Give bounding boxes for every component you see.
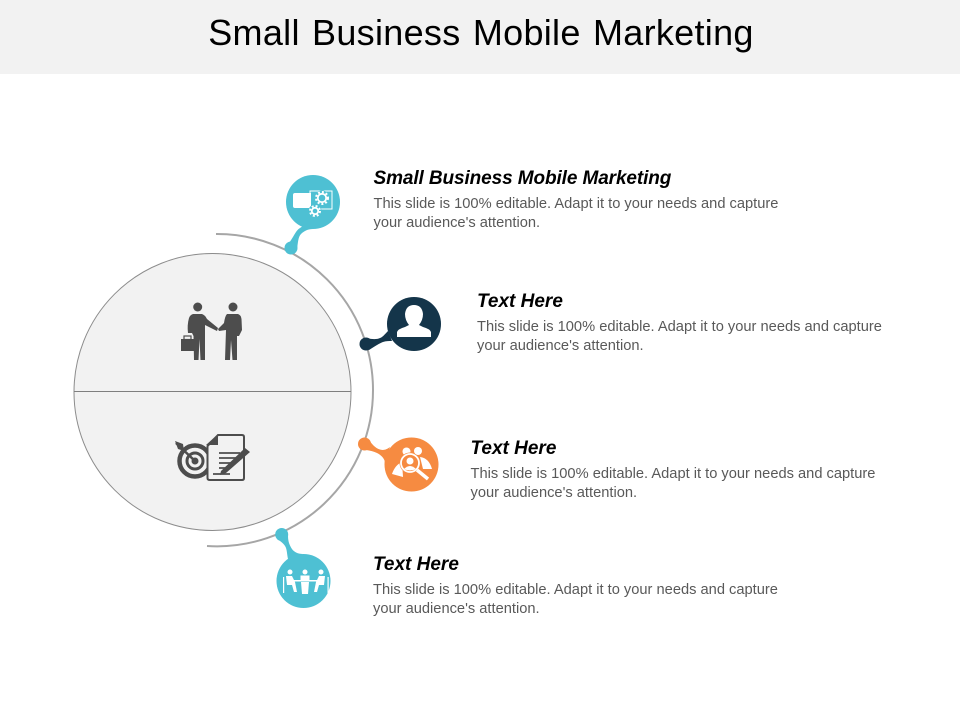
pin 1: gears (teal) xyxy=(284,175,340,254)
pin 4: meeting (teal) xyxy=(275,528,330,608)
pin 2: person (navy) xyxy=(360,297,441,351)
icon: target and document xyxy=(175,434,250,480)
text block 3 xyxy=(470,438,875,500)
icon: meeting xyxy=(283,570,329,594)
text block 3: This slide is 100% editable. Adapt it to your needs and capture xyxy=(470,466,875,482)
pin 3: team search (orange) xyxy=(358,438,438,492)
icon: team search xyxy=(392,447,432,479)
text block 1 xyxy=(374,168,778,230)
text block 2: Text Here xyxy=(477,290,563,312)
text block 2: your audience's attention. xyxy=(477,338,644,354)
text block 3: Text Here xyxy=(470,438,556,458)
outer arc xyxy=(207,234,373,546)
title band xyxy=(0,0,960,74)
text block 1: your audience's attention. xyxy=(374,214,540,230)
icon: handshake xyxy=(181,302,242,360)
text block 1: Small Business Mobile Marketing xyxy=(374,168,671,188)
title: Small Business Mobile Marketing xyxy=(208,12,754,53)
text block 4: Text Here xyxy=(373,554,459,574)
text block 2: This slide is 100% editable. Adapt it to your needs and capture xyxy=(477,318,882,334)
text block 4: your audience's attention. xyxy=(373,600,540,616)
text block 3: your audience's attention. xyxy=(470,484,637,500)
text block 2 xyxy=(477,290,882,354)
text block 4: This slide is 100% editable. Adapt it to your needs and capture xyxy=(373,582,778,598)
icon: gears xyxy=(293,190,332,218)
text block 4 xyxy=(373,554,778,616)
icon: person xyxy=(397,305,431,337)
text block 1: This slide is 100% editable. Adapt it to your needs and capture xyxy=(374,196,778,212)
central split circle xyxy=(74,254,351,530)
